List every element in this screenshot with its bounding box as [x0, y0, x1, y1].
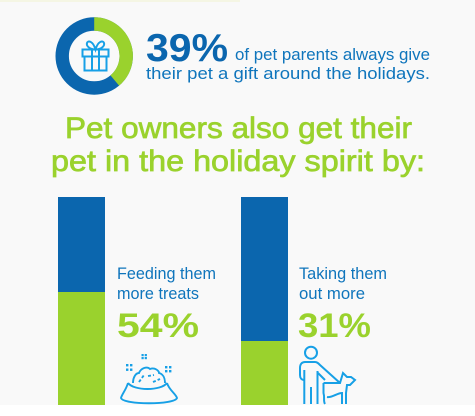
stat: 39% of pet parents	[146, 27, 430, 83]
heading: pet in the holiday spirit by:	[51, 145, 425, 178]
text: taking them out more: Taking them	[299, 265, 387, 283]
icon: person walking dog	[300, 347, 355, 404]
stat: 39% of pet parents: of pet parents always give	[235, 45, 430, 64]
heading	[51, 112, 425, 178]
stat: 31%: 31%	[298, 307, 371, 345]
text: feeding them more treats	[117, 265, 216, 303]
icon: gift	[82, 41, 108, 70]
text: taking them out more	[299, 265, 387, 303]
icon: food bowl	[121, 354, 177, 403]
stat: 39% of pet parents: 39%	[146, 27, 228, 70]
text: feeding them more treats: Feeding them	[117, 265, 216, 283]
stat: 54%: 54%	[117, 307, 199, 345]
stat: 39% of pet parents: their pet a gift around the holidays.	[146, 64, 430, 83]
bar: taking out 31%	[241, 197, 288, 405]
text: feeding them more treats: more treats	[117, 285, 199, 303]
text: taking them out more: out more	[299, 285, 365, 303]
donut chart: 39%	[62, 24, 126, 88]
bar: feeding treats 54%	[58, 197, 105, 405]
heading: Pet owners also get their	[65, 112, 412, 145]
